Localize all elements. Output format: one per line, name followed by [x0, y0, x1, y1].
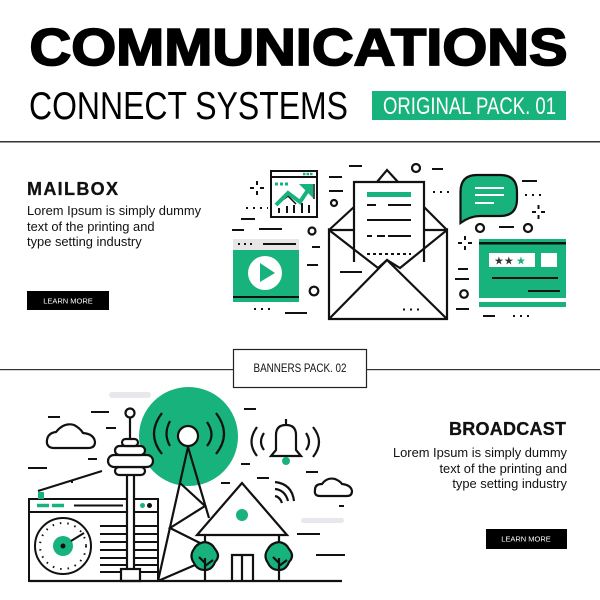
- icon: envelope: [329, 170, 447, 319]
- signal circle: [139, 387, 238, 486]
- decorative dashes: [28, 409, 345, 555]
- icon: cloud right: [315, 479, 352, 496]
- icon: wifi: [275, 482, 294, 503]
- button: learn more (mailbox): LEARN MORE: [43, 296, 93, 306]
- icon: speech bubble: [460, 175, 517, 223]
- icon: cloud left: [47, 424, 95, 448]
- title: COMMUNICATIONS: [30, 19, 568, 77]
- mailbox illustration: [232, 164, 566, 319]
- broadcast text: [393, 445, 568, 491]
- icon: rating window: ★: [516, 256, 526, 268]
- icon: chart window: [271, 171, 317, 217]
- broadcast heading: BROADCAST: [449, 419, 566, 439]
- broadcast text: text of the printing and: [439, 461, 567, 476]
- mailbox text: [27, 203, 202, 249]
- broadcast text: Lorem Ipsum is simply dummy: [393, 445, 568, 460]
- icon: bell: [252, 419, 319, 465]
- icon: video player: [233, 239, 299, 302]
- banners box: BANNERS PACK. 02: [254, 363, 346, 375]
- decorative dashes: [232, 166, 537, 316]
- button: learn more (mailbox): [27, 291, 109, 310]
- icon: radio: [29, 471, 158, 581]
- mailbox text: Lorem Ipsum is simply dummy: [27, 203, 202, 218]
- ground line: [29, 580, 342, 582]
- icon: rating window: [479, 239, 566, 307]
- decorative circles: [308, 164, 532, 298]
- mailbox heading: MAILBOX: [27, 179, 118, 199]
- broadcast text: type setting industry: [452, 476, 568, 491]
- broadcast illustration: [28, 387, 352, 581]
- banners box: [234, 350, 366, 388]
- mailbox text: text of the printing and: [27, 219, 155, 234]
- subtitle: CONNECT SYSTEMS: [29, 85, 348, 128]
- icon: tower: [108, 408, 153, 581]
- icon: rating window: ★★: [494, 256, 514, 268]
- button: learn more (broadcast): [486, 529, 567, 549]
- icon: signal tower: [154, 413, 224, 581]
- letter lines: [340, 192, 424, 310]
- icon: house: [197, 483, 287, 581]
- icon: trees: [192, 542, 292, 581]
- icon: sparkles: [250, 181, 545, 250]
- mailbox text: type setting industry: [27, 234, 142, 249]
- gray bars: [109, 392, 344, 523]
- button: learn more (broadcast): LEARN MORE: [501, 534, 551, 544]
